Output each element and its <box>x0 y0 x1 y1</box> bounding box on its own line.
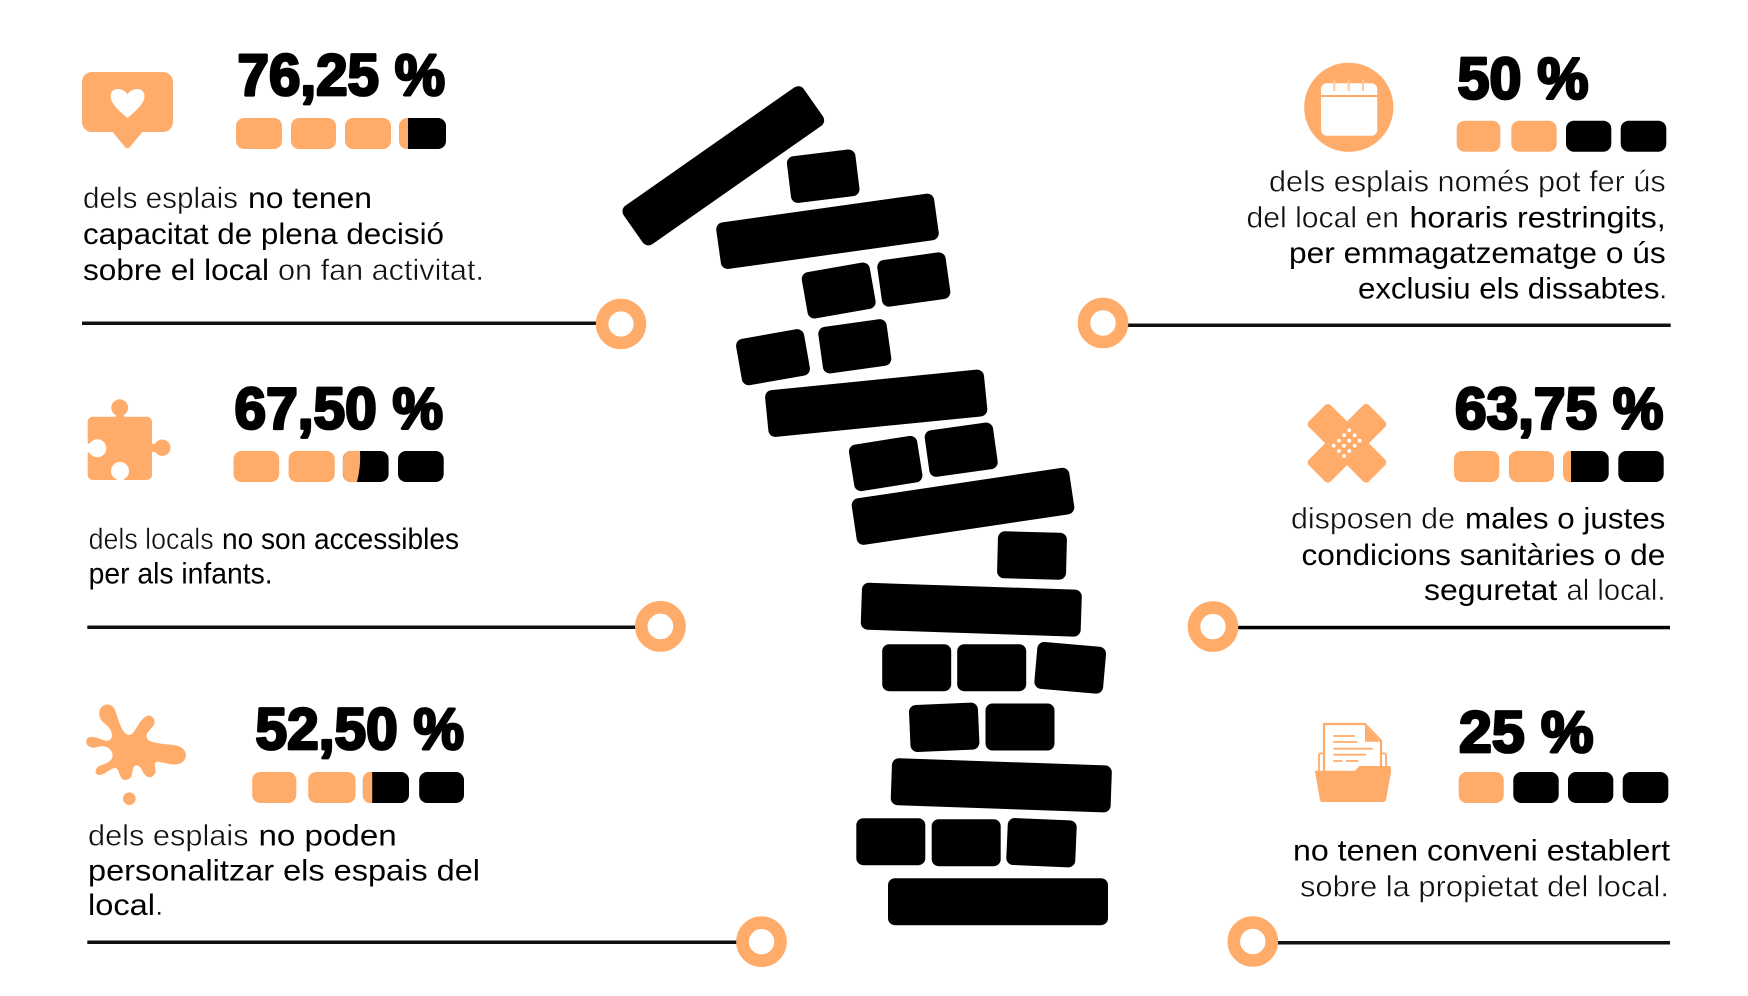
number: 63,75 %: 63,75 % <box>1455 376 1663 442</box>
progress bar: 2.1 of 4 <box>252 772 464 803</box>
text block: condicions sanitàries o de <box>1302 539 1665 572</box>
progress bar: 3.05 of 4 <box>236 118 446 149</box>
text block <box>1246 166 1667 305</box>
number: 25 %: 25 % <box>1459 700 1594 765</box>
panel: 50 % restricted hours <box>1084 46 1671 342</box>
number: 52,50 %: 52,50 % <box>256 697 464 762</box>
text block: sobre la propietat del local. <box>1300 870 1669 904</box>
text block: seguretat <box>1424 574 1558 607</box>
text block: capacitat de plena decisió <box>83 218 444 251</box>
text block: no tenen <box>248 182 372 215</box>
icon: puzzle piece <box>86 399 170 482</box>
progress bar: 2 of 4 <box>1457 121 1666 152</box>
text block: no poden <box>258 820 397 852</box>
connector line and ring <box>1194 608 1670 646</box>
text block <box>83 182 484 287</box>
text block: disposen de <box>1291 502 1455 536</box>
text block: males o justes <box>1465 502 1665 536</box>
number: 50 %: 50 % <box>1458 46 1588 112</box>
panel: 52,50 % personalise spaces <box>86 697 780 961</box>
text block: no son accessibles <box>222 523 459 556</box>
icon: calendar in circle <box>1304 63 1393 152</box>
connector line and ring <box>87 607 680 646</box>
text block: dels esplais <box>88 820 249 852</box>
icon: crossed bandage <box>1306 402 1388 484</box>
text block: per emmagatzematge o ús <box>1289 237 1666 270</box>
text block: dels esplais <box>83 182 238 215</box>
text block: sobre el local <box>83 254 269 287</box>
icon: folder with document <box>1315 724 1391 802</box>
text block: no tenen conveni establert <box>1293 835 1671 868</box>
text block: . <box>155 889 163 922</box>
icon: heart speech bubble <box>82 72 173 148</box>
text block: dels esplais només pot fer ús <box>1269 166 1666 198</box>
progress bar: 2.7 of 4 <box>234 451 444 482</box>
progress bar: 2.55 of 4 <box>1454 451 1664 482</box>
text block <box>88 820 480 922</box>
panel: 67,50 % accessibility <box>86 376 680 646</box>
text block: personalitzar els espais del <box>88 854 480 888</box>
text block: horaris restringits, <box>1410 202 1666 234</box>
panel: 76,25 % capacity to decide <box>82 43 640 343</box>
text block <box>1293 835 1671 904</box>
text block: exclusiu els dissabtes <box>1358 272 1660 305</box>
text block: . <box>1659 272 1667 305</box>
text block: per als infants. <box>89 558 273 590</box>
panel: 63,75 % sanitary conditions <box>1194 376 1670 646</box>
icon: paint splash <box>86 705 186 805</box>
text block <box>89 523 459 590</box>
connector line and ring <box>82 305 640 343</box>
number: 67,50 %: 67,50 % <box>234 376 443 442</box>
text block: local <box>88 889 155 922</box>
text block <box>1291 502 1666 607</box>
connector line and ring <box>87 923 781 961</box>
text block: al local. <box>1566 574 1666 607</box>
text block: on fan activitat. <box>278 254 484 287</box>
jenga tower of black bricks <box>620 83 1112 925</box>
text block: del local en <box>1246 202 1399 234</box>
panel: 25 % no agreement <box>1234 700 1671 960</box>
text block: dels locals <box>89 523 214 556</box>
progress bar: 1 of 4 <box>1459 772 1668 803</box>
number: 76,25 %: 76,25 % <box>238 43 445 108</box>
connector line and ring <box>1084 304 1671 342</box>
connector line and ring <box>1234 922 1670 960</box>
